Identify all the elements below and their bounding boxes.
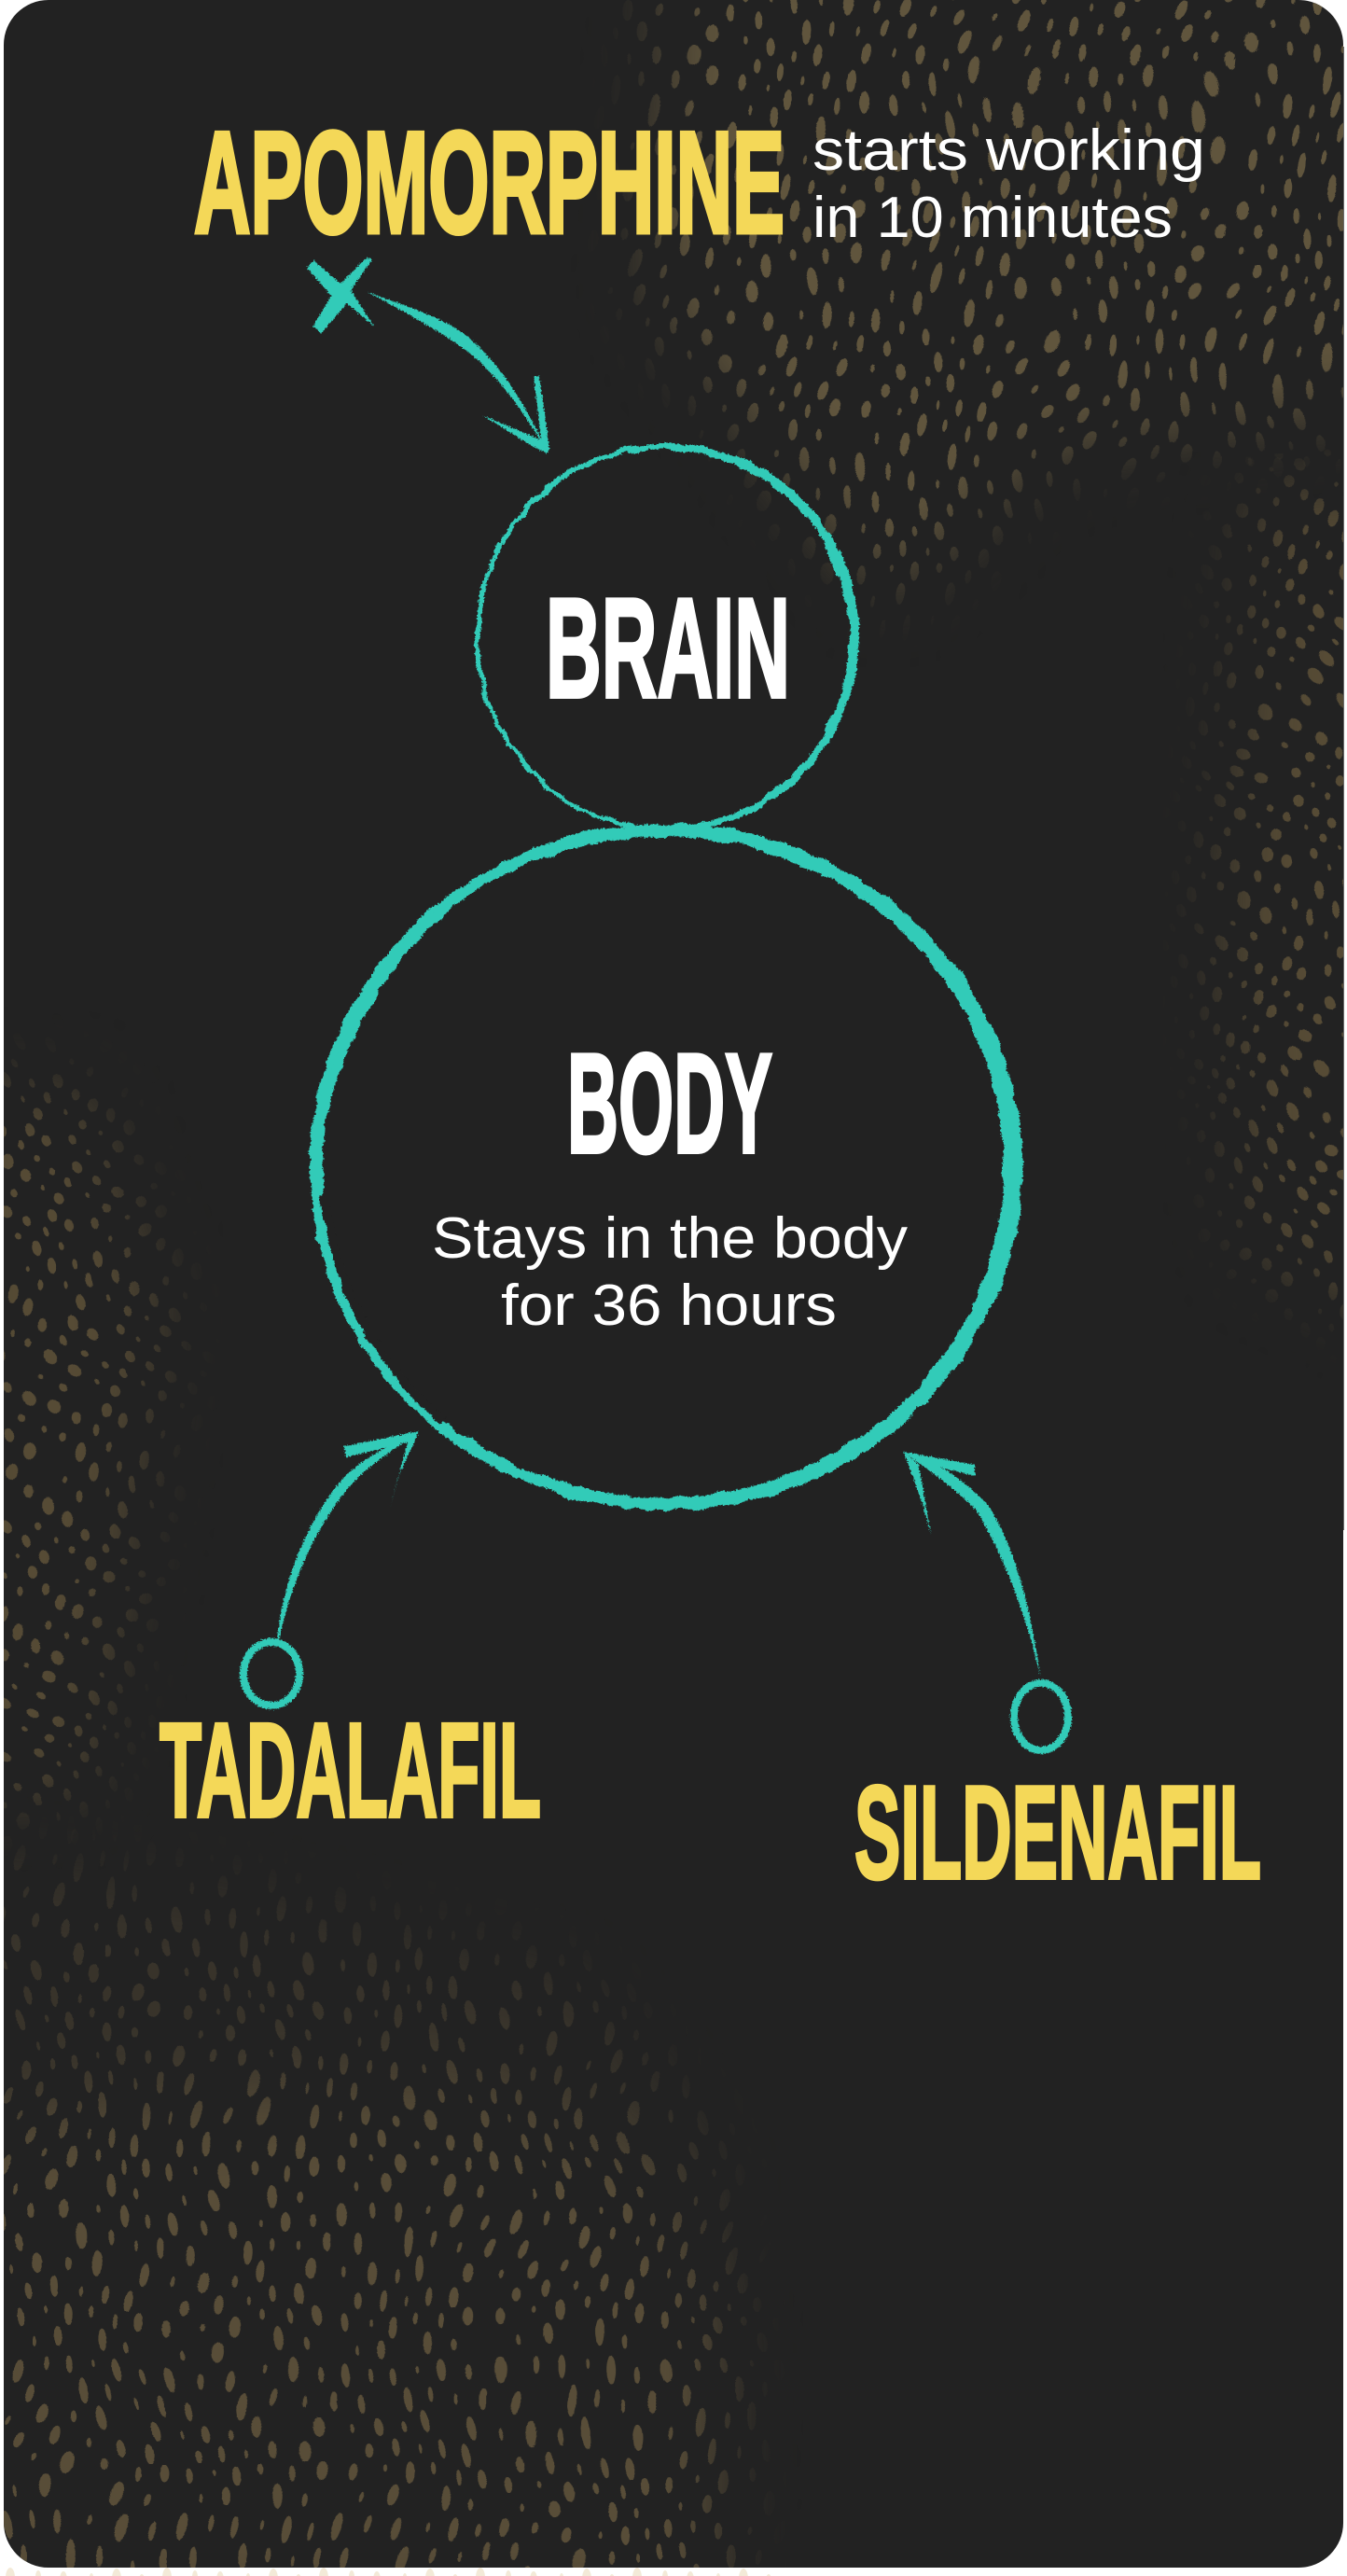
arrow: X mark to brain xyxy=(368,292,549,453)
circle: body xyxy=(310,824,1022,1511)
text block: starts working in 10 minutes: in 10 minutes xyxy=(812,186,1173,250)
heading: Apomorphine: APOMORPHINE xyxy=(194,102,785,263)
circle: brain xyxy=(475,443,859,831)
text block: stays in the body for 36 hours: for 36 hours xyxy=(501,1274,837,1338)
text block: starts working in 10 minutes: starts working xyxy=(812,118,1205,183)
icon: X mark start xyxy=(307,258,374,334)
arrow: sildenafil to body xyxy=(904,1452,1040,1676)
text block: stays in the body for 36 hours: Stays in the body xyxy=(432,1206,908,1271)
label: body: BODY xyxy=(567,1024,772,1183)
label: brain: BRAIN xyxy=(546,569,790,728)
icon: tadalafil ring xyxy=(243,1642,299,1706)
arrow: tadalafil to body xyxy=(277,1431,419,1639)
icon: sildenafil ring xyxy=(1014,1683,1068,1750)
text block: starts working in 10 minutes xyxy=(812,118,1205,250)
label: tadalafil: TADALAFIL xyxy=(160,1695,541,1845)
text block: stays in the body for 36 hours xyxy=(432,1206,908,1338)
